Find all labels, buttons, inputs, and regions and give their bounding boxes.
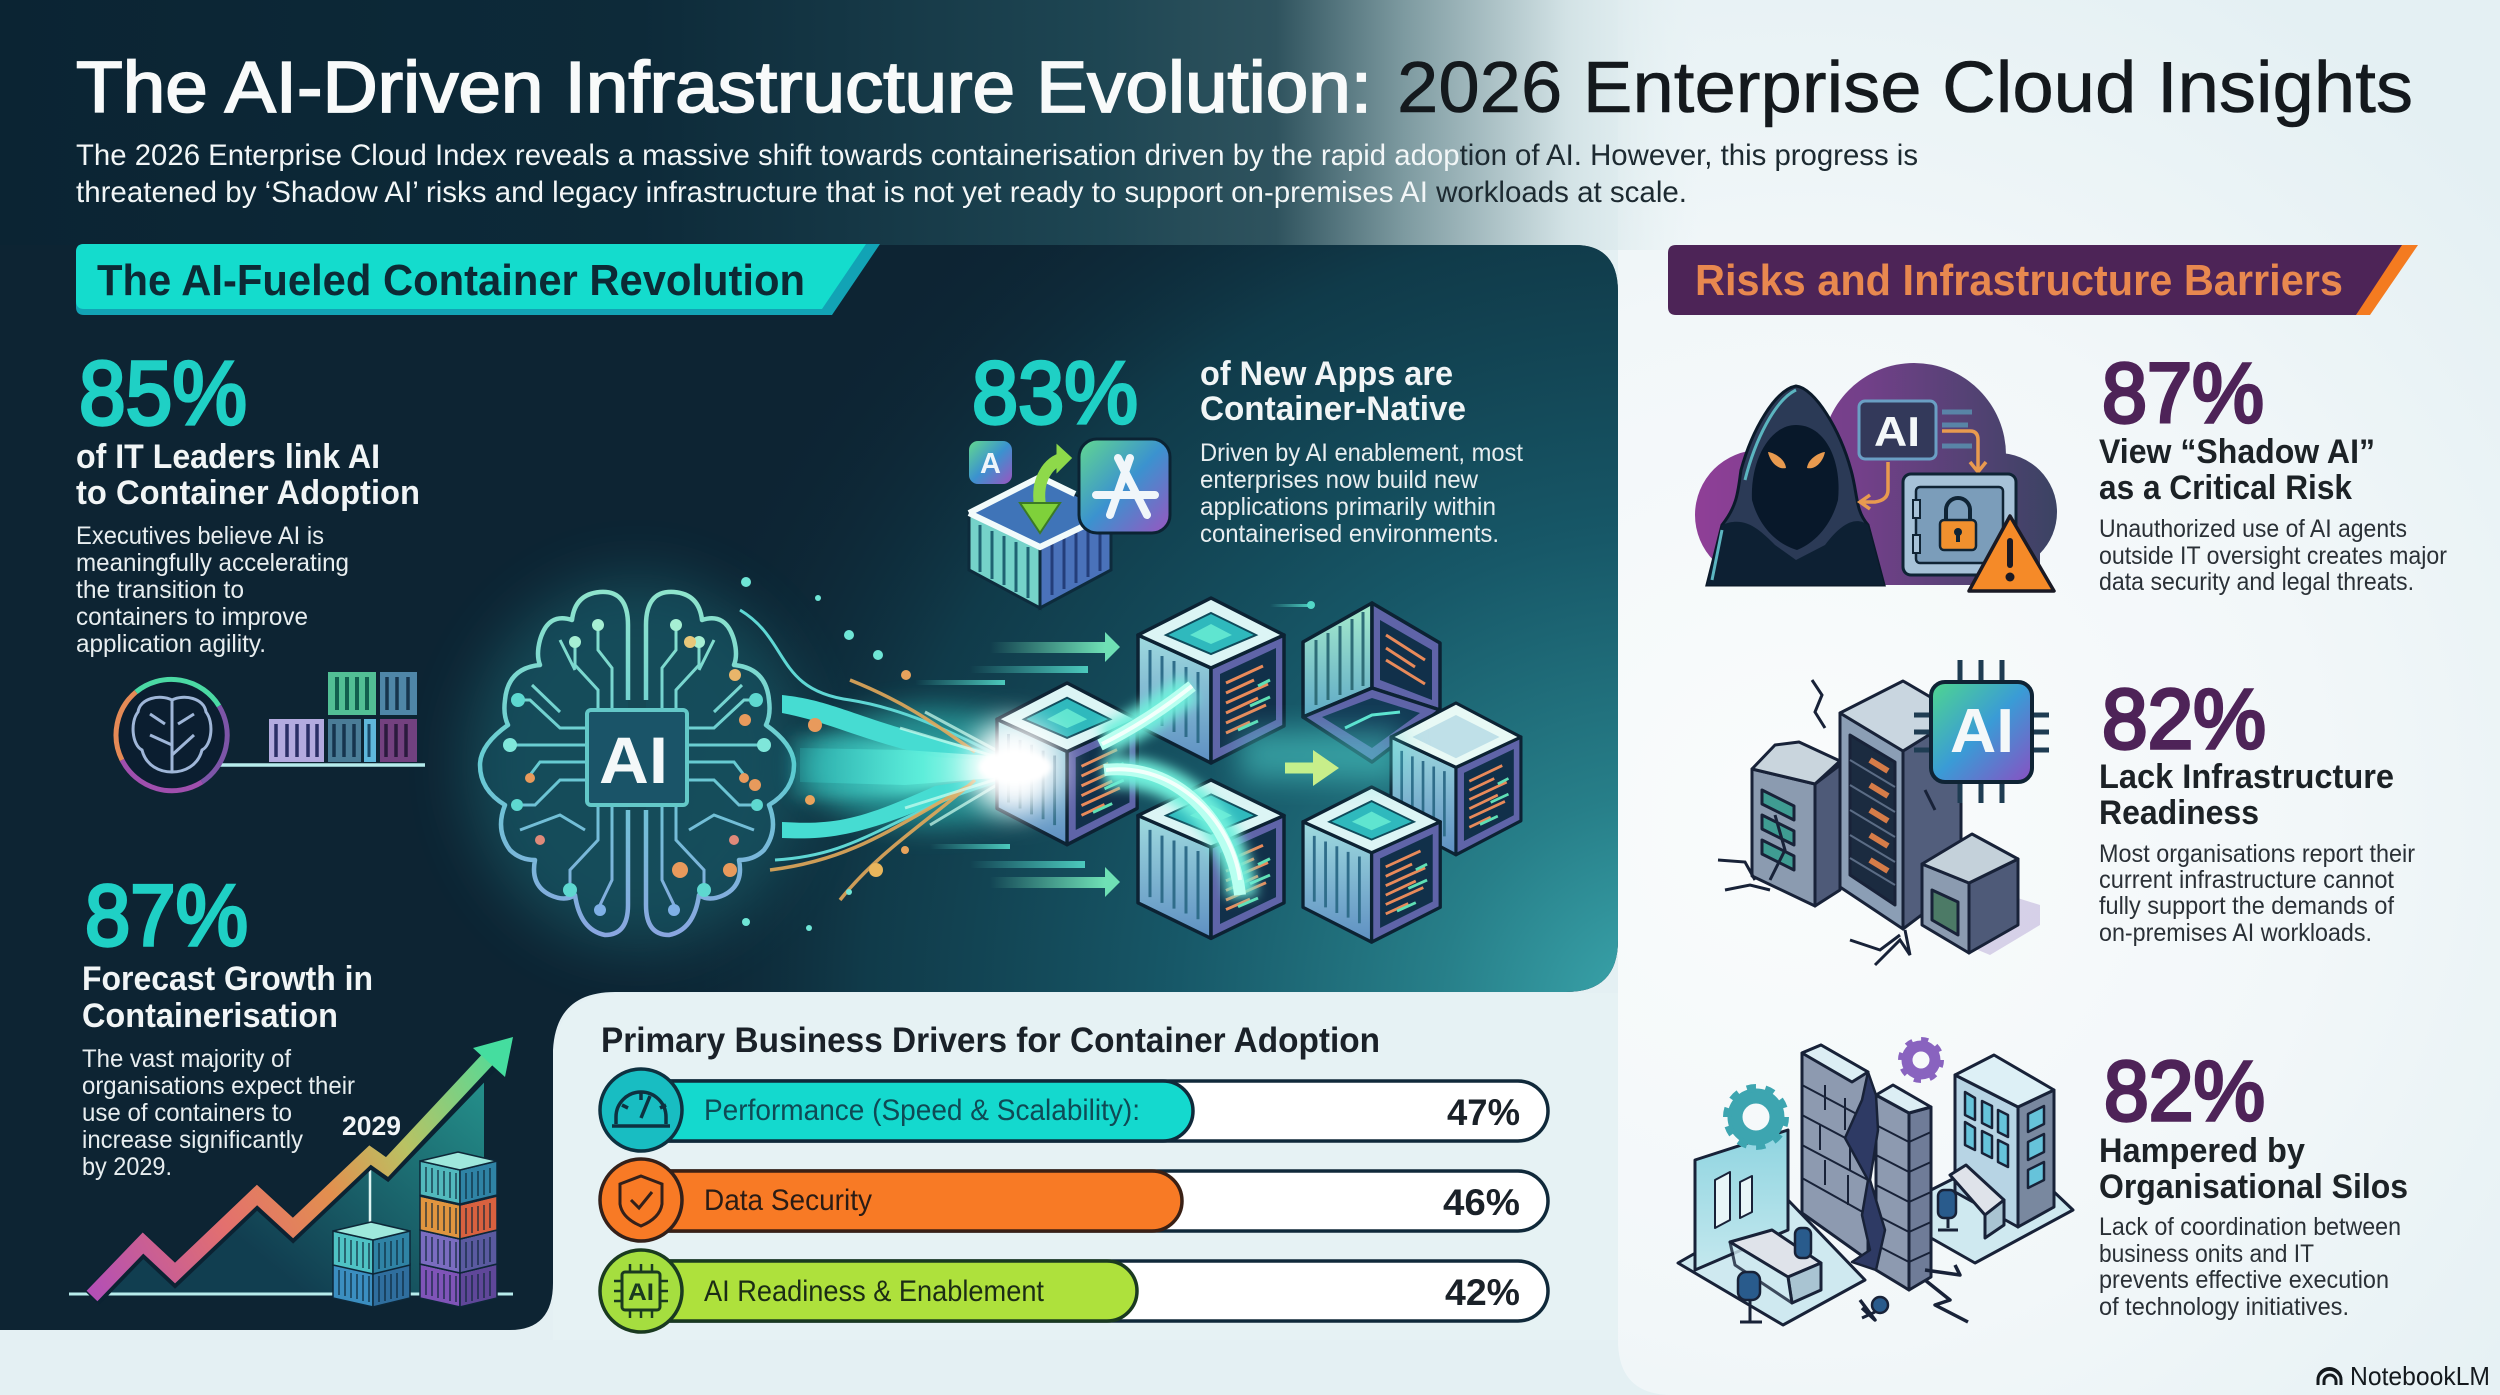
stat: 82% organisational silos: business onits and IT <box>2099 1240 2314 1268</box>
icon: brain ring and containers <box>116 672 425 791</box>
stat: 87% shadow AI: data security and legal threats. <box>2099 568 2414 596</box>
stat: 85% of IT leaders: containers to improve <box>76 603 308 631</box>
stat: 83% of new apps: Driven by AI enablement, most <box>1200 439 1523 467</box>
cube: open inverted dark top <box>1303 603 1440 762</box>
stat: 83% of new apps: of New Apps are <box>1200 355 1453 393</box>
title <box>76 48 2413 128</box>
stat: 85% of IT leaders: 85% <box>79 344 247 444</box>
stat: 82% infrastructure readiness: Readiness <box>2099 794 2259 832</box>
bar: AI Readiness 42%: 42% <box>1445 1272 1520 1313</box>
stat: 87% shadow AI: 87% <box>2102 346 2264 440</box>
hooded figure <box>1707 386 1884 585</box>
left room wall <box>1695 1130 1788 1270</box>
stat: 82% infrastructure readiness <box>2099 672 2415 947</box>
stat: 87% forecast growth: use of containers to <box>82 1099 292 1127</box>
right desk <box>1950 1165 2004 1215</box>
stat: 82% organisational silos: of technology initiatives. <box>2099 1293 2349 1321</box>
header band background <box>0 0 1702 250</box>
stat: 87% shadow AI <box>2099 346 2447 596</box>
stat: 82% organisational silos: prevents effective execution <box>2099 1266 2389 1294</box>
stat: 87% shadow AI: Unauthorized use of AI agents <box>2099 515 2407 543</box>
stat: 87% forecast growth: by 2029. <box>82 1153 172 1181</box>
particles <box>741 577 911 931</box>
stat: 87% forecast growth: Forecast Growth in <box>82 960 373 998</box>
subtitle text: threatened by ‘Shadow AI’ risks and legacy infrastructure that is not yet ready to support on-premises AI workloads at scale. <box>76 176 1687 209</box>
stat: 85% of IT leaders: meaningfully accelerating <box>76 549 349 577</box>
safe <box>1903 474 2016 575</box>
stat: 83% of new apps <box>972 343 1523 548</box>
stat: 87% forecast growth: The vast majority of <box>82 1045 291 1073</box>
stat: 87% shadow AI: as a Critical Risk <box>2099 469 2352 507</box>
left block <box>1752 742 1840 906</box>
heading banner: Risks and Infrastructure Barriers: Risks and Infrastructure Barriers <box>1695 256 2343 305</box>
stat: 82% infrastructure readiness: current infrastructure cannot <box>2099 866 2394 894</box>
title: The AI-Driven Infrastructure Evolution: <box>76 48 1372 128</box>
brick wall <box>1802 1045 1868 1260</box>
warning triangle <box>1969 516 2054 591</box>
subtitle text: The 2026 Enterprise Cloud Index reveals a massive shift towards containerisation driven by the rapid adoption of AI. However, this progress is <box>76 139 1918 172</box>
stat: 87% forecast growth <box>82 868 373 1181</box>
panel: dark AI container revolution <box>0 245 1618 1330</box>
energy swirls over cubes <box>969 686 1400 897</box>
panel: right column background <box>1618 0 2500 1395</box>
bar: Data Security 46%: Data Security <box>704 1184 872 1217</box>
stat: 87% shadow AI: View “Shadow AI” <box>2099 433 2375 471</box>
stat: 87% shadow AI: outside IT oversight creates major <box>2099 542 2447 570</box>
stat: 85% of IT leaders: of IT Leaders link AI <box>76 438 380 476</box>
stat: 83% of new apps: Container-Native <box>1200 390 1466 428</box>
orange arrows <box>1860 431 1986 509</box>
stat: 82% organisational silos: 82% <box>2104 1044 2265 1138</box>
heading banner: The AI-Fueled Container Revolution <box>76 244 880 315</box>
illustration: organisational silos <box>1678 1040 2073 1325</box>
bar: Performance 47%: Performance (Speed & Scalability): <box>704 1094 1140 1127</box>
icon: app entering container <box>969 439 1170 608</box>
panel: primary business drivers: Primary Business Drivers for Container Adoption <box>601 1021 1380 1060</box>
stat: 82% infrastructure readiness: Lack Infrastructure <box>2099 758 2394 796</box>
stat: 82% infrastructure readiness: on-premises AI workloads. <box>2099 919 2372 947</box>
stat: 87% forecast growth: organisations expect their <box>82 1072 355 1100</box>
AI box: AI <box>1874 408 1920 455</box>
stat: 82% infrastructure readiness: 82% <box>2102 672 2266 766</box>
stat: 87% forecast growth: increase significantly <box>82 1126 303 1154</box>
illustration: shadow AI hooded figure <box>1695 363 2057 591</box>
illustration: container cubes <box>969 598 1521 942</box>
stat: 83% of new apps: applications primarily within <box>1200 493 1496 521</box>
bar: Performance 47%: 47% <box>1447 1092 1520 1133</box>
stat: 82% organisational silos: Organisational Silos <box>2099 1168 2408 1206</box>
bar: Data Security 46% <box>600 1159 1548 1241</box>
AI chip: AI <box>1950 697 2014 766</box>
tall server <box>1840 681 1961 929</box>
stat: 85% of IT leaders: application agility. <box>76 630 266 658</box>
left desk <box>1730 1230 1821 1277</box>
bar: Data Security 46%: 46% <box>1443 1182 1520 1223</box>
stat: 87% forecast growth: Containerisation <box>82 997 338 1035</box>
gear teal <box>1727 1088 1785 1146</box>
right building <box>1955 1075 2018 1227</box>
stat: 82% organisational silos: Hampered by <box>2099 1132 2305 1170</box>
heading banner: The AI-Fueled Container Revolution: The AI-Fueled Container Revolution <box>97 256 805 305</box>
chart: growth arrow with container stacks <box>69 1037 513 1307</box>
panel: primary business drivers <box>553 993 1618 1340</box>
arrows: data flowing to containers <box>915 601 1339 897</box>
bar: AI Readiness 42%: AI <box>628 1279 654 1306</box>
stat: 85% of IT leaders: the transition to <box>76 576 244 604</box>
icon: app entering container: A <box>980 448 1001 480</box>
cracks <box>1718 680 1935 965</box>
floors <box>1678 1200 1865 1325</box>
heading banner: Risks and Infrastructure Barriers <box>1668 245 2418 315</box>
purple gear <box>1901 1040 1941 1080</box>
illustration: AI energy stream <box>740 610 1060 900</box>
title: 2026 Enterprise Cloud Insights <box>1397 48 2413 128</box>
fallen pin <box>1872 1297 1888 1313</box>
illustration: cracked servers and AI chip <box>1718 660 2049 965</box>
stat: 85% of IT leaders: to Container Adoption <box>76 474 420 512</box>
illustration: AI brain <box>467 578 807 948</box>
AI chip <box>587 710 687 805</box>
chart: growth arrow with container stacks: 2029 <box>342 1111 401 1141</box>
subtitle text <box>76 139 1918 209</box>
stat: 85% of IT leaders: Executives believe AI is <box>76 522 324 550</box>
stat: 85% of IT leaders <box>76 344 420 658</box>
stat: 82% organisational silos <box>2099 1044 2408 1321</box>
logo: NotebookLM: NotebookLM <box>2350 1361 2490 1391</box>
bar: AI Readiness 42%: AI Readiness & Enablement <box>704 1275 1045 1308</box>
stat: 82% infrastructure readiness: fully support the demands of <box>2099 892 2394 920</box>
bar: AI Readiness 42% <box>600 1250 1548 1332</box>
stat: 83% of new apps: containerised environments. <box>1200 520 1499 548</box>
right block <box>1922 834 2018 953</box>
stat: 83% of new apps: 83% <box>972 343 1138 442</box>
bar: Performance 47% <box>600 1069 1548 1151</box>
stat: 83% of new apps: enterprises now build new <box>1200 466 1479 494</box>
stat: 82% infrastructure readiness: Most organisations report their <box>2099 840 2415 868</box>
AI chip <box>1914 660 2049 803</box>
AI chip: AI <box>599 723 668 797</box>
AI box <box>1859 401 1972 459</box>
stat: 82% organisational silos: Lack of coordination between <box>2099 1213 2401 1241</box>
stat: 87% forecast growth: 87% <box>85 868 248 964</box>
